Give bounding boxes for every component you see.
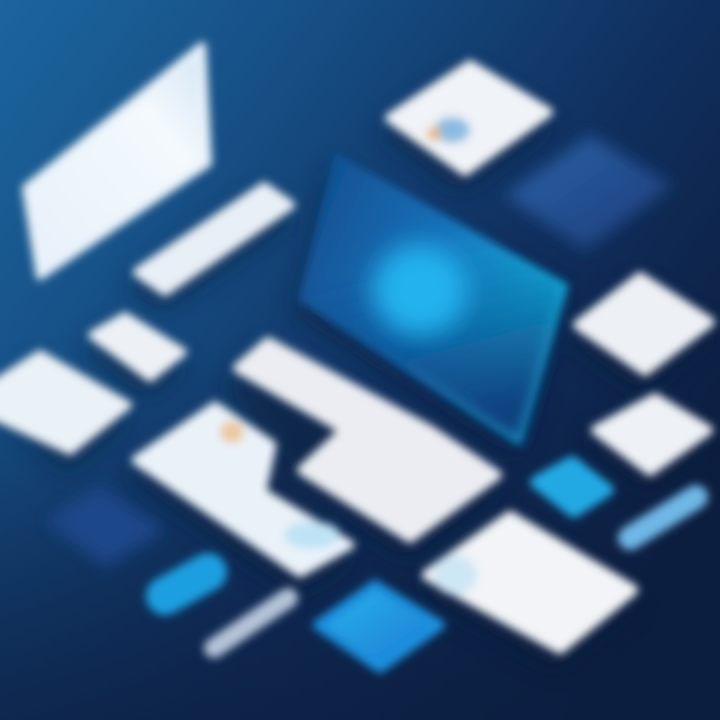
panel: central white keyboard card xyxy=(238,342,497,538)
panel: large white monitor top left xyxy=(26,46,208,276)
icon: grey pill bottom xyxy=(214,598,288,648)
panel: white card with light blue accents xyxy=(136,406,350,573)
panel: small white card left xyxy=(92,316,183,378)
panel: white pill bar xyxy=(138,187,290,291)
icon: light blue pill right xyxy=(630,497,696,538)
panel: blue diamond bottom xyxy=(318,585,440,668)
panel: left white card xyxy=(0,354,128,451)
panel: dark blue card top right xyxy=(505,135,672,250)
icon: cyan pill bottom left xyxy=(165,572,208,596)
panel: central blue screen xyxy=(298,152,568,445)
panel: top right white card with chart xyxy=(390,65,548,171)
icon: glowing circle xyxy=(372,244,468,336)
panel: large white card bottom right xyxy=(428,517,632,648)
panel: white card right lower xyxy=(596,398,708,471)
panel: dark blue card bottom left xyxy=(45,485,165,567)
icon: cyan rounded shape right xyxy=(536,462,608,512)
panel: white card right upper xyxy=(578,277,710,371)
